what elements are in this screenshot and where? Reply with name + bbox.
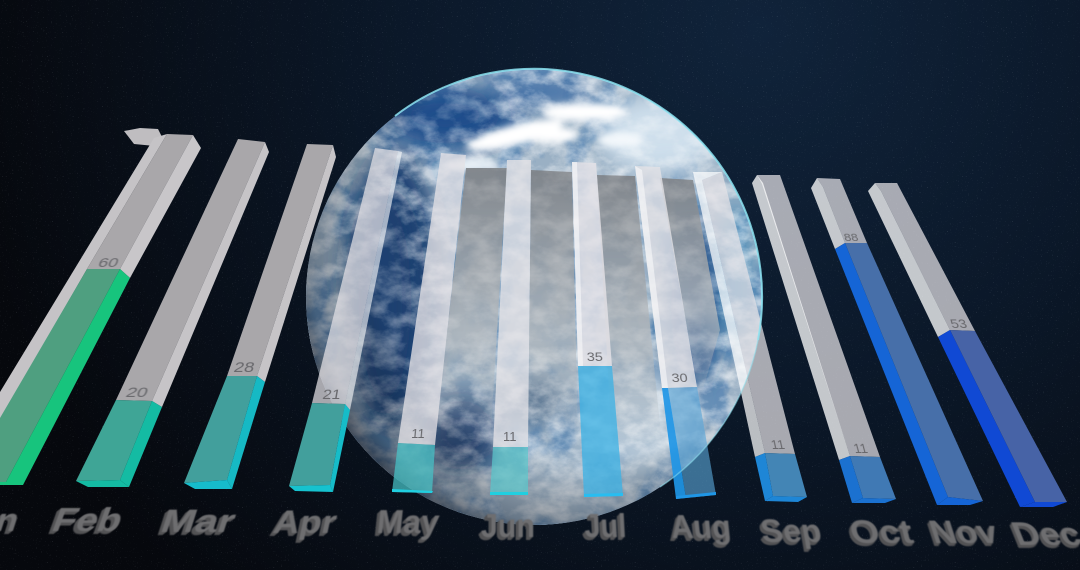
- bar: Sep 11: [693, 172, 807, 502]
- bar: Apr 21: [289, 148, 402, 492]
- value: 11: 11: [503, 429, 516, 444]
- month labels: May: [375, 504, 442, 541]
- month labels: Mar: [156, 503, 241, 540]
- bar: Feb 20: [76, 139, 269, 487]
- bar: Dec 53: [868, 183, 1067, 507]
- month labels: Feb: [47, 502, 129, 539]
- month labels: Jul: [583, 507, 627, 544]
- month labels: Dec: [1006, 516, 1080, 553]
- value: 30: 30: [671, 371, 688, 385]
- value: 11: 11: [852, 441, 869, 456]
- value: 28: 28: [232, 360, 256, 375]
- month labels: Jun: [481, 507, 535, 544]
- value: 35: 35: [586, 350, 603, 364]
- globe atmosphere shell: [395, 69, 762, 510]
- value: 21: 21: [321, 387, 342, 403]
- bar: May 11: [392, 153, 466, 493]
- month labels: Oct: [846, 514, 917, 551]
- bar: Jun 11: [490, 160, 531, 495]
- month labels: Sep: [758, 513, 824, 550]
- month labels: Apr: [270, 504, 340, 541]
- bar: Mar 28: [184, 144, 336, 489]
- globe: earth with clouds: [300, 60, 770, 530]
- bar: Jan 60: [0, 134, 201, 485]
- value: 11: 11: [769, 437, 786, 452]
- value: 53: 53: [949, 317, 969, 331]
- bar: Nov 88: [811, 178, 983, 505]
- value: 11: 11: [411, 426, 426, 441]
- bar: Oct 11: [752, 175, 896, 503]
- value: 88: 88: [842, 231, 860, 244]
- month labels: Nov: [924, 514, 1003, 551]
- bar: Aug 30: [635, 166, 716, 499]
- bar: Jul 35: [572, 162, 623, 497]
- grey translucent panels between central bars: [434, 168, 720, 445]
- broken fragment above January bar: [124, 128, 163, 146]
- month labels: Aug: [669, 509, 733, 546]
- value: 60: 60: [96, 256, 121, 270]
- month labels: [0, 502, 1080, 553]
- value: 20: 20: [124, 385, 151, 400]
